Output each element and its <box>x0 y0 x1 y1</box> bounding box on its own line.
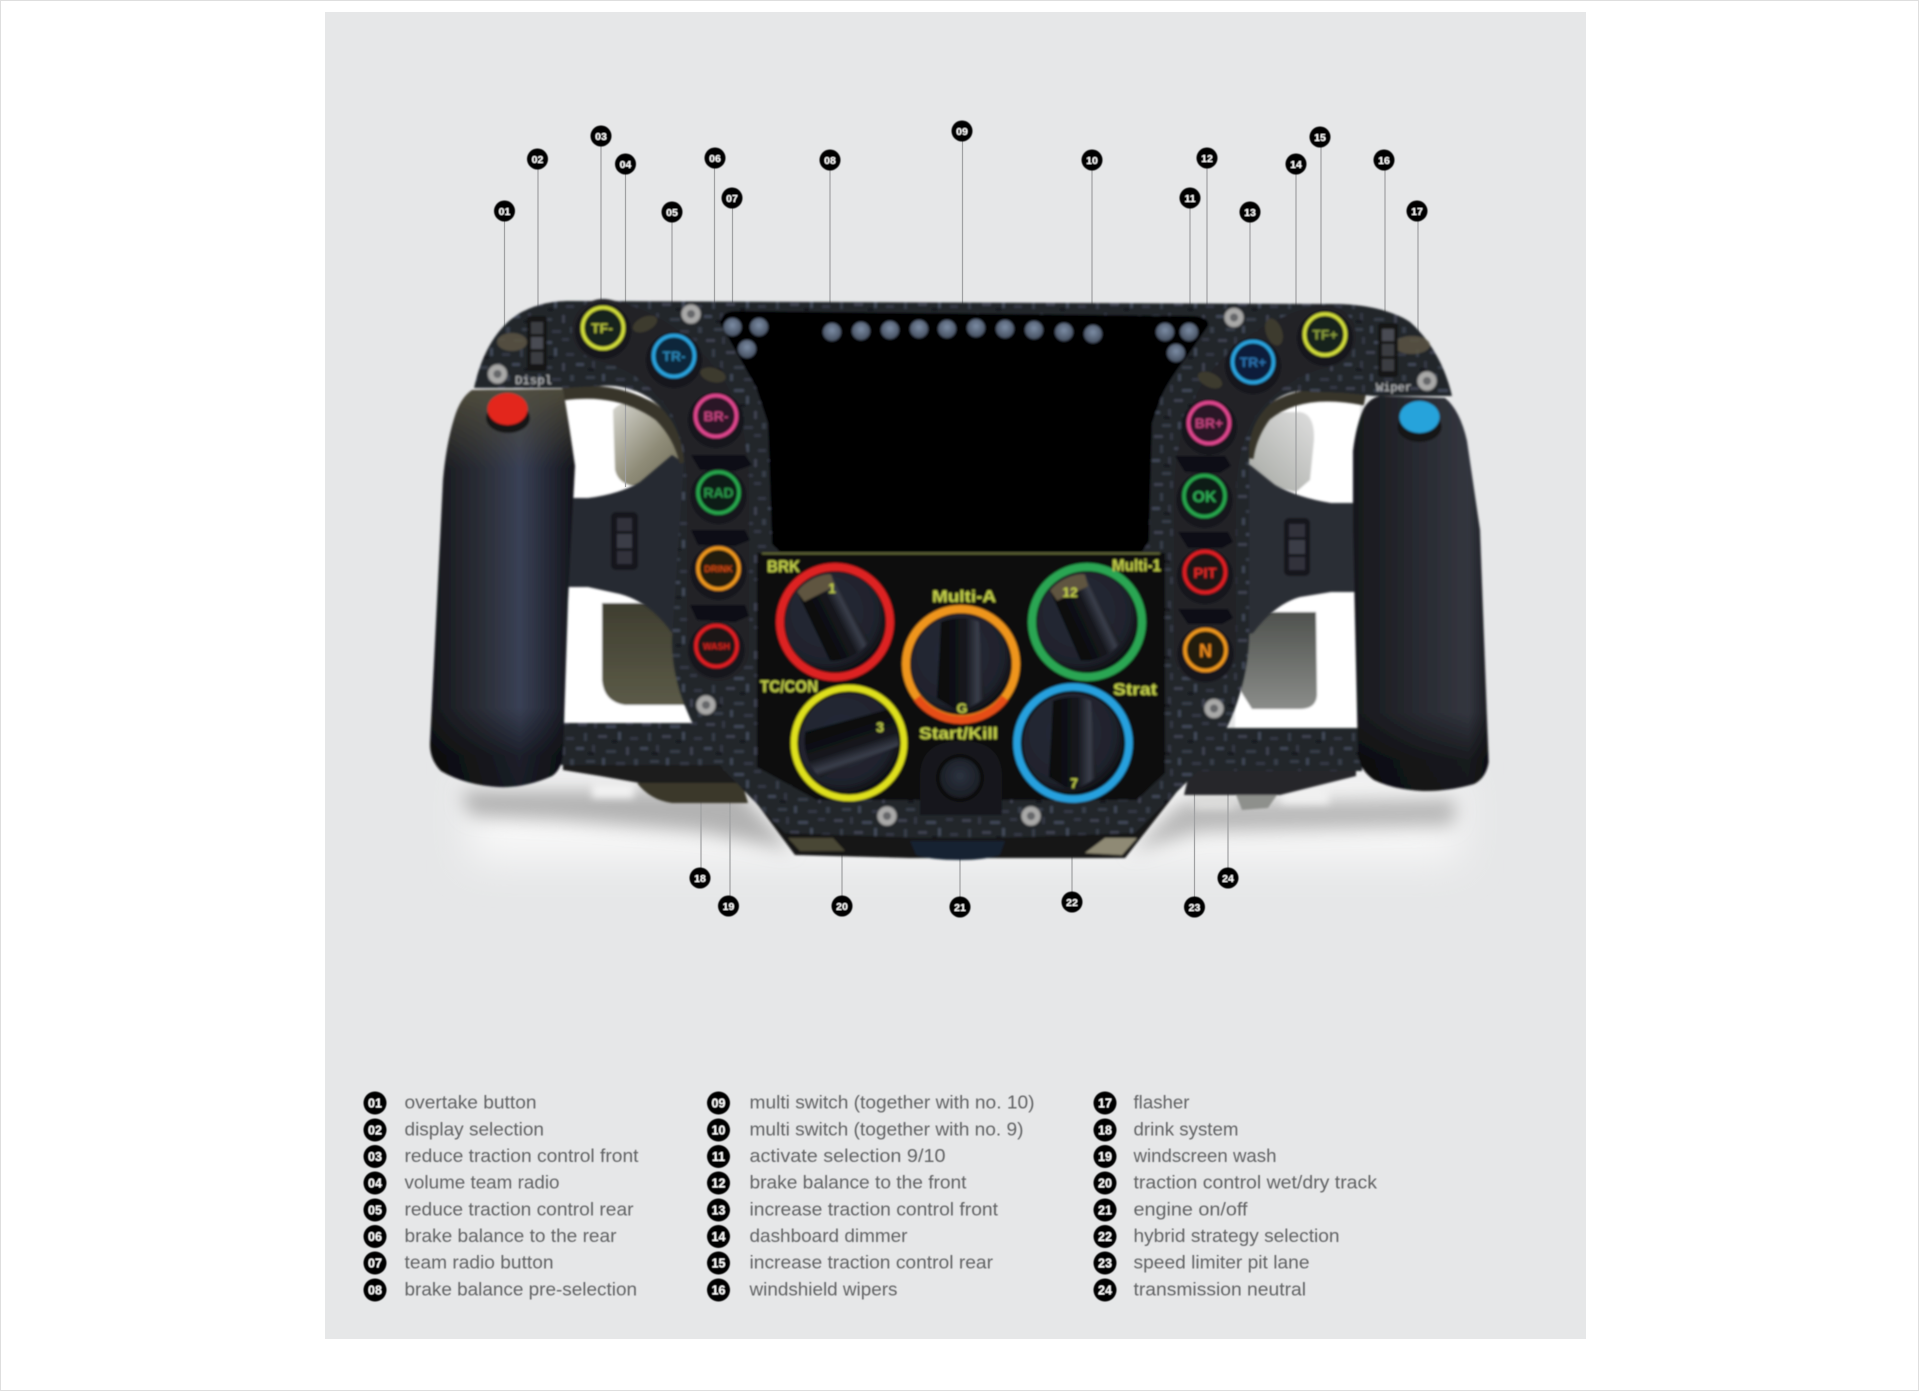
left opening <box>563 392 690 727</box>
left button holder band <box>603 330 718 650</box>
right opening <box>1235 398 1360 733</box>
button: OK: OK <box>1192 489 1217 506</box>
button: PIT: PIT <box>1193 565 1217 582</box>
legend column 1: team radio button <box>404 1252 554 1272</box>
right grip <box>1353 396 1489 791</box>
overtake button <box>486 393 530 433</box>
screen <box>786 352 1141 550</box>
paddle upper right <box>1240 412 1314 492</box>
rotary: Strat <box>1017 687 1129 799</box>
legend column 1: overtake button <box>404 1092 536 1112</box>
button: N: N <box>1199 641 1212 661</box>
rotary: Multi-A: G <box>957 700 968 716</box>
legend column 2 <box>707 1092 1034 1302</box>
levers between buttons <box>690 455 1233 624</box>
button: RAD: RAD <box>703 484 734 500</box>
legend column 1: 04 <box>368 1176 382 1190</box>
numbered callouts: 20 <box>836 901 848 913</box>
wheel openings with paddles behind <box>563 392 1360 733</box>
right spoke plate <box>1225 465 1356 640</box>
legend column 1: reduce traction control rear <box>404 1200 634 1220</box>
panel labels: Multi-1 <box>1112 556 1161 575</box>
button: DRNK: DRINK <box>704 564 733 574</box>
panel labels: Strat <box>1113 680 1157 699</box>
lower left carbon bar <box>555 723 740 765</box>
legend column 3: transmission neutral <box>1134 1280 1306 1300</box>
button: WASH: WASH <box>703 642 730 652</box>
button: TF- <box>575 303 631 359</box>
legend column 3: traction control wet/dry track <box>1134 1172 1378 1192</box>
paddle upper left <box>613 400 690 487</box>
legend column 1: reduce traction control front <box>404 1146 638 1166</box>
legend column 3: drink system <box>1134 1120 1238 1140</box>
numbered callouts: 14 <box>1290 159 1302 171</box>
legend column 2: multi switch (together with no. 9) <box>750 1120 1024 1140</box>
panel labels: TC/CON <box>760 677 818 696</box>
legend column 2: windshield wipers <box>748 1280 898 1300</box>
legend column 2: dashboard dimmer <box>750 1226 908 1246</box>
legend column 1: 01 <box>368 1096 382 1110</box>
numbered callouts: 12 <box>1201 153 1213 165</box>
numbered callouts: 10 <box>1086 155 1098 167</box>
rotary control panel <box>757 553 1165 800</box>
right button holder band <box>1205 336 1325 652</box>
top switch right <box>1378 323 1398 377</box>
carbon body <box>474 301 1452 838</box>
numbered callouts: 24 <box>1222 873 1234 885</box>
legend column 3: 18 <box>1098 1124 1112 1138</box>
legend column 2: increase traction control rear <box>750 1252 993 1272</box>
rotary: TC/CON <box>794 688 904 798</box>
legend column 2: 16 <box>712 1284 725 1298</box>
legend column 2: brake balance to the front <box>750 1172 966 1192</box>
flasher button <box>1398 401 1442 442</box>
lower right carbon bar <box>1190 728 1362 771</box>
numbered callouts: 08 <box>824 155 836 167</box>
panel top line <box>762 552 1160 554</box>
legend column 2: 11 <box>712 1150 725 1164</box>
button: N <box>1178 626 1234 682</box>
legend column 2: multi switch (together with no. 10) <box>750 1092 1034 1112</box>
button: BR+: BR+ <box>1195 415 1223 431</box>
photo glow and floor shadow under the wheel <box>463 775 1460 860</box>
steering wheel <box>430 301 1489 860</box>
underside brackets and strips <box>563 763 1356 855</box>
rotary: Multi-1 <box>1032 567 1142 677</box>
legend column 1: 03 <box>368 1150 382 1164</box>
opening top bands <box>563 392 1365 462</box>
numbered callouts: 21 <box>954 902 966 914</box>
legend column 2: 13 <box>712 1204 725 1218</box>
engine start button <box>920 741 1002 815</box>
rotary: BRK <box>780 567 890 677</box>
numbered callouts: 11 <box>1184 193 1196 205</box>
button: OK <box>1176 472 1232 528</box>
panel labels: BRK <box>767 557 801 576</box>
spoke switch left <box>611 512 638 570</box>
panel labels: Multi-A <box>932 587 996 606</box>
legend column 3: windscreen wash <box>1132 1146 1276 1166</box>
legend column 3: 24 <box>1098 1284 1112 1298</box>
callout leader lines <box>504 131 1418 907</box>
numbered callouts: 23 <box>1189 902 1200 914</box>
button: TR-: TR- <box>662 348 686 364</box>
shift LEDs <box>724 318 1198 362</box>
paddle lower left <box>602 603 690 705</box>
panel labels <box>760 556 1161 743</box>
numbered callouts: 05 <box>666 207 678 219</box>
label Displ: Displ <box>515 374 552 388</box>
legend column 2: 14 <box>712 1230 725 1244</box>
legend column 2: 12 <box>712 1176 725 1190</box>
legend column 3: engine on/off <box>1134 1200 1249 1220</box>
panel labels: Start/Kill <box>919 724 998 743</box>
rotary: TC/CON: 3 <box>876 719 884 735</box>
numbered callouts: 02 <box>532 154 543 166</box>
shoulder tan patches <box>497 333 1430 354</box>
button: WASH <box>688 622 744 678</box>
legend column 1: 07 <box>368 1256 382 1270</box>
screw centres <box>494 310 1431 820</box>
legend column 2: increase traction control front <box>750 1200 998 1220</box>
legend column 3: 19 <box>1098 1150 1112 1164</box>
legend column 1 <box>364 1092 638 1302</box>
button: TR+: TR+ <box>1240 354 1266 370</box>
button: DRNK <box>690 544 746 600</box>
legend column 1: brake balance to the rear <box>404 1226 616 1246</box>
legend column 3: hybrid strategy selection <box>1134 1226 1340 1246</box>
numbered callouts: 04 <box>620 159 631 171</box>
numbered callouts: 07 <box>726 193 738 205</box>
paddle lower right <box>1240 612 1317 709</box>
numbered callouts: 19 <box>723 901 734 913</box>
button: BR+ <box>1181 399 1237 455</box>
left spoke plate <box>568 455 695 640</box>
button: BR-: BR- <box>704 408 729 424</box>
button: TR+ <box>1225 338 1281 394</box>
button: PIT <box>1177 548 1233 604</box>
numbered callouts <box>494 120 1428 918</box>
label Wiper: Wiper <box>1376 381 1412 395</box>
button: TF+: TF+ <box>1312 326 1338 342</box>
numbered callouts: 03 <box>595 131 607 143</box>
numbered callouts: 16 <box>1378 155 1390 167</box>
legend column 3: 22 <box>1098 1230 1112 1244</box>
numbered callouts: 15 <box>1314 132 1326 144</box>
legend column 1: 05 <box>368 1204 382 1218</box>
rotary: Multi-1: 12 <box>1062 584 1078 600</box>
legend column 2: 10 <box>712 1124 725 1138</box>
legend column 1: 08 <box>368 1284 382 1298</box>
left grip <box>430 389 575 787</box>
button: BR- <box>688 392 744 448</box>
button: TF-: TF- <box>591 320 613 336</box>
undercarriage behind body <box>738 775 1190 858</box>
legend column 3: 21 <box>1098 1204 1112 1218</box>
legend column 3: flasher <box>1134 1092 1190 1112</box>
legend column 3: 23 <box>1098 1256 1112 1270</box>
numbered callouts: 06 <box>709 153 721 165</box>
legend column 3 <box>1094 1092 1378 1302</box>
legend column 2: 15 <box>712 1256 725 1270</box>
button: TR- <box>646 332 702 388</box>
legend column 3: speed limiter pit lane <box>1134 1252 1310 1272</box>
legend column 1: 06 <box>368 1230 382 1244</box>
legend column 2: activate selection 9/10 <box>750 1146 946 1166</box>
numbered callouts: 13 <box>1244 207 1256 219</box>
legend column 1: brake balance pre-selection <box>404 1280 637 1300</box>
numbered callouts: 18 <box>694 873 706 885</box>
legend column 2: 09 <box>712 1096 725 1110</box>
black display area <box>720 311 1208 552</box>
rotary: Strat: 7 <box>1070 775 1078 791</box>
bottom lever <box>910 841 1005 860</box>
grey panel <box>325 12 1586 1339</box>
screws <box>488 304 1436 826</box>
numbered callouts: 09 <box>956 126 968 138</box>
legend column 1: volume team radio <box>404 1172 560 1192</box>
spoke switch right <box>1284 518 1310 576</box>
numbered callouts: 22 <box>1066 897 1078 909</box>
numbered callouts: 01 <box>499 206 510 218</box>
rotary: BRK: 1 <box>828 580 836 596</box>
legend column 3: 20 <box>1098 1176 1112 1190</box>
button: TF+ <box>1297 310 1353 366</box>
numbered callouts: 17 <box>1411 206 1423 218</box>
top switch left <box>527 316 547 371</box>
legend column 3: 17 <box>1098 1096 1112 1110</box>
rotary: Multi-A <box>906 609 1016 720</box>
legend column 1: 02 <box>368 1124 382 1138</box>
legend column 1: display selection <box>404 1120 544 1140</box>
button: RAD <box>690 468 746 524</box>
small top levers <box>630 312 1286 392</box>
